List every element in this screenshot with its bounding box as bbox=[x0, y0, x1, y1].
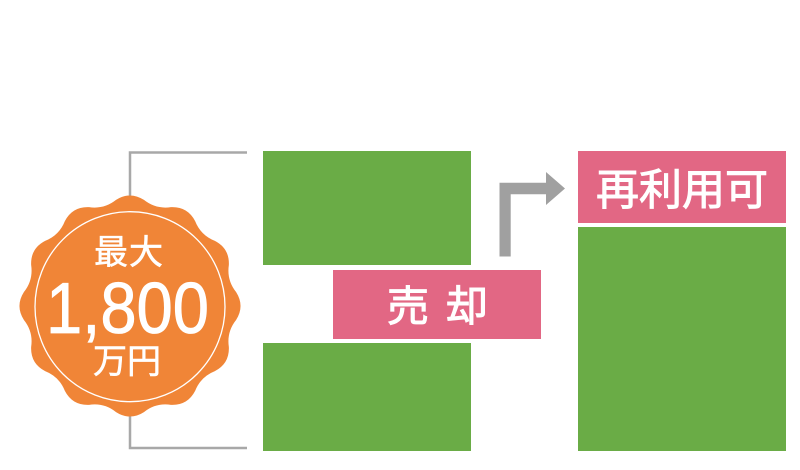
badge: label top: 最大 bbox=[94, 234, 164, 272]
bracket: bottom bbox=[130, 415, 247, 448]
badge: amount: 1,800 bbox=[46, 269, 209, 349]
reusable label text: 再利用可 bbox=[596, 167, 768, 215]
sale label text: 却 bbox=[446, 283, 488, 330]
panel: right green block bbox=[578, 227, 786, 451]
panel: sale label bbox=[333, 270, 541, 339]
arrow: sale to reusable bbox=[500, 172, 565, 256]
panel: reusable label bbox=[578, 151, 786, 223]
badge: scalloped seal bbox=[19, 195, 241, 417]
bracket: top bbox=[130, 152, 247, 197]
panel: lower green block bbox=[263, 343, 471, 451]
badge: maximum 18 million yen bbox=[19, 195, 241, 417]
badge: unit: 万円 bbox=[93, 343, 161, 381]
sale label text: 売 bbox=[387, 283, 429, 330]
panel: upper green block bbox=[263, 151, 471, 265]
badge: inner ring bbox=[35, 212, 225, 402]
